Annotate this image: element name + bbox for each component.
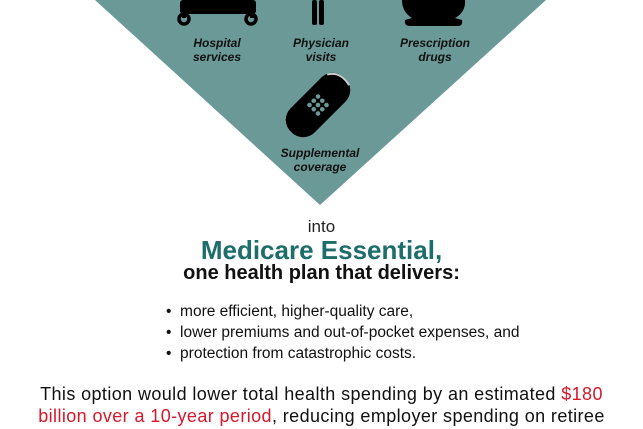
heading: Medicare Essential: Medicare Essential, [201,235,442,265]
icon: prescription [402,0,465,26]
label: physician visits: Physician [293,36,349,50]
icon: physician [312,0,324,25]
bullet list: • protection from catastrophic costs. [166,345,416,362]
label: supplemental coverage: Supplemental [281,146,359,160]
label: supplemental coverage [280,146,360,174]
label: physician visits [293,36,349,64]
bullet list [166,303,520,362]
label: prescription drugs: drugs [418,50,452,64]
icon: bandage [279,66,357,144]
bullet list: • more efficient, higher-quality care, [166,303,413,320]
icon: hospital bed [179,0,256,24]
label: hospital services [193,36,241,64]
text: savings summary: This option would lower total health spending by an estimated $180 [40,384,603,404]
label: hospital services: Hospital [193,36,241,50]
text: savings summary [38,384,605,426]
subheading: one health plan that delivers: [183,262,460,284]
label: prescription drugs [400,36,470,64]
panel: inverted triangle [95,0,546,205]
bullet list: • lower premiums and out-of-pocket expenses, and [166,324,520,341]
text: into: into [308,217,335,236]
text: savings summary: billion over a 10-year period, reducing employer spending on retiree [38,406,605,426]
label: hospital services: services [193,50,241,64]
label: physician visits: visits [306,50,336,64]
label: prescription drugs: Prescription [400,36,470,50]
label: supplemental coverage: coverage [294,160,346,174]
